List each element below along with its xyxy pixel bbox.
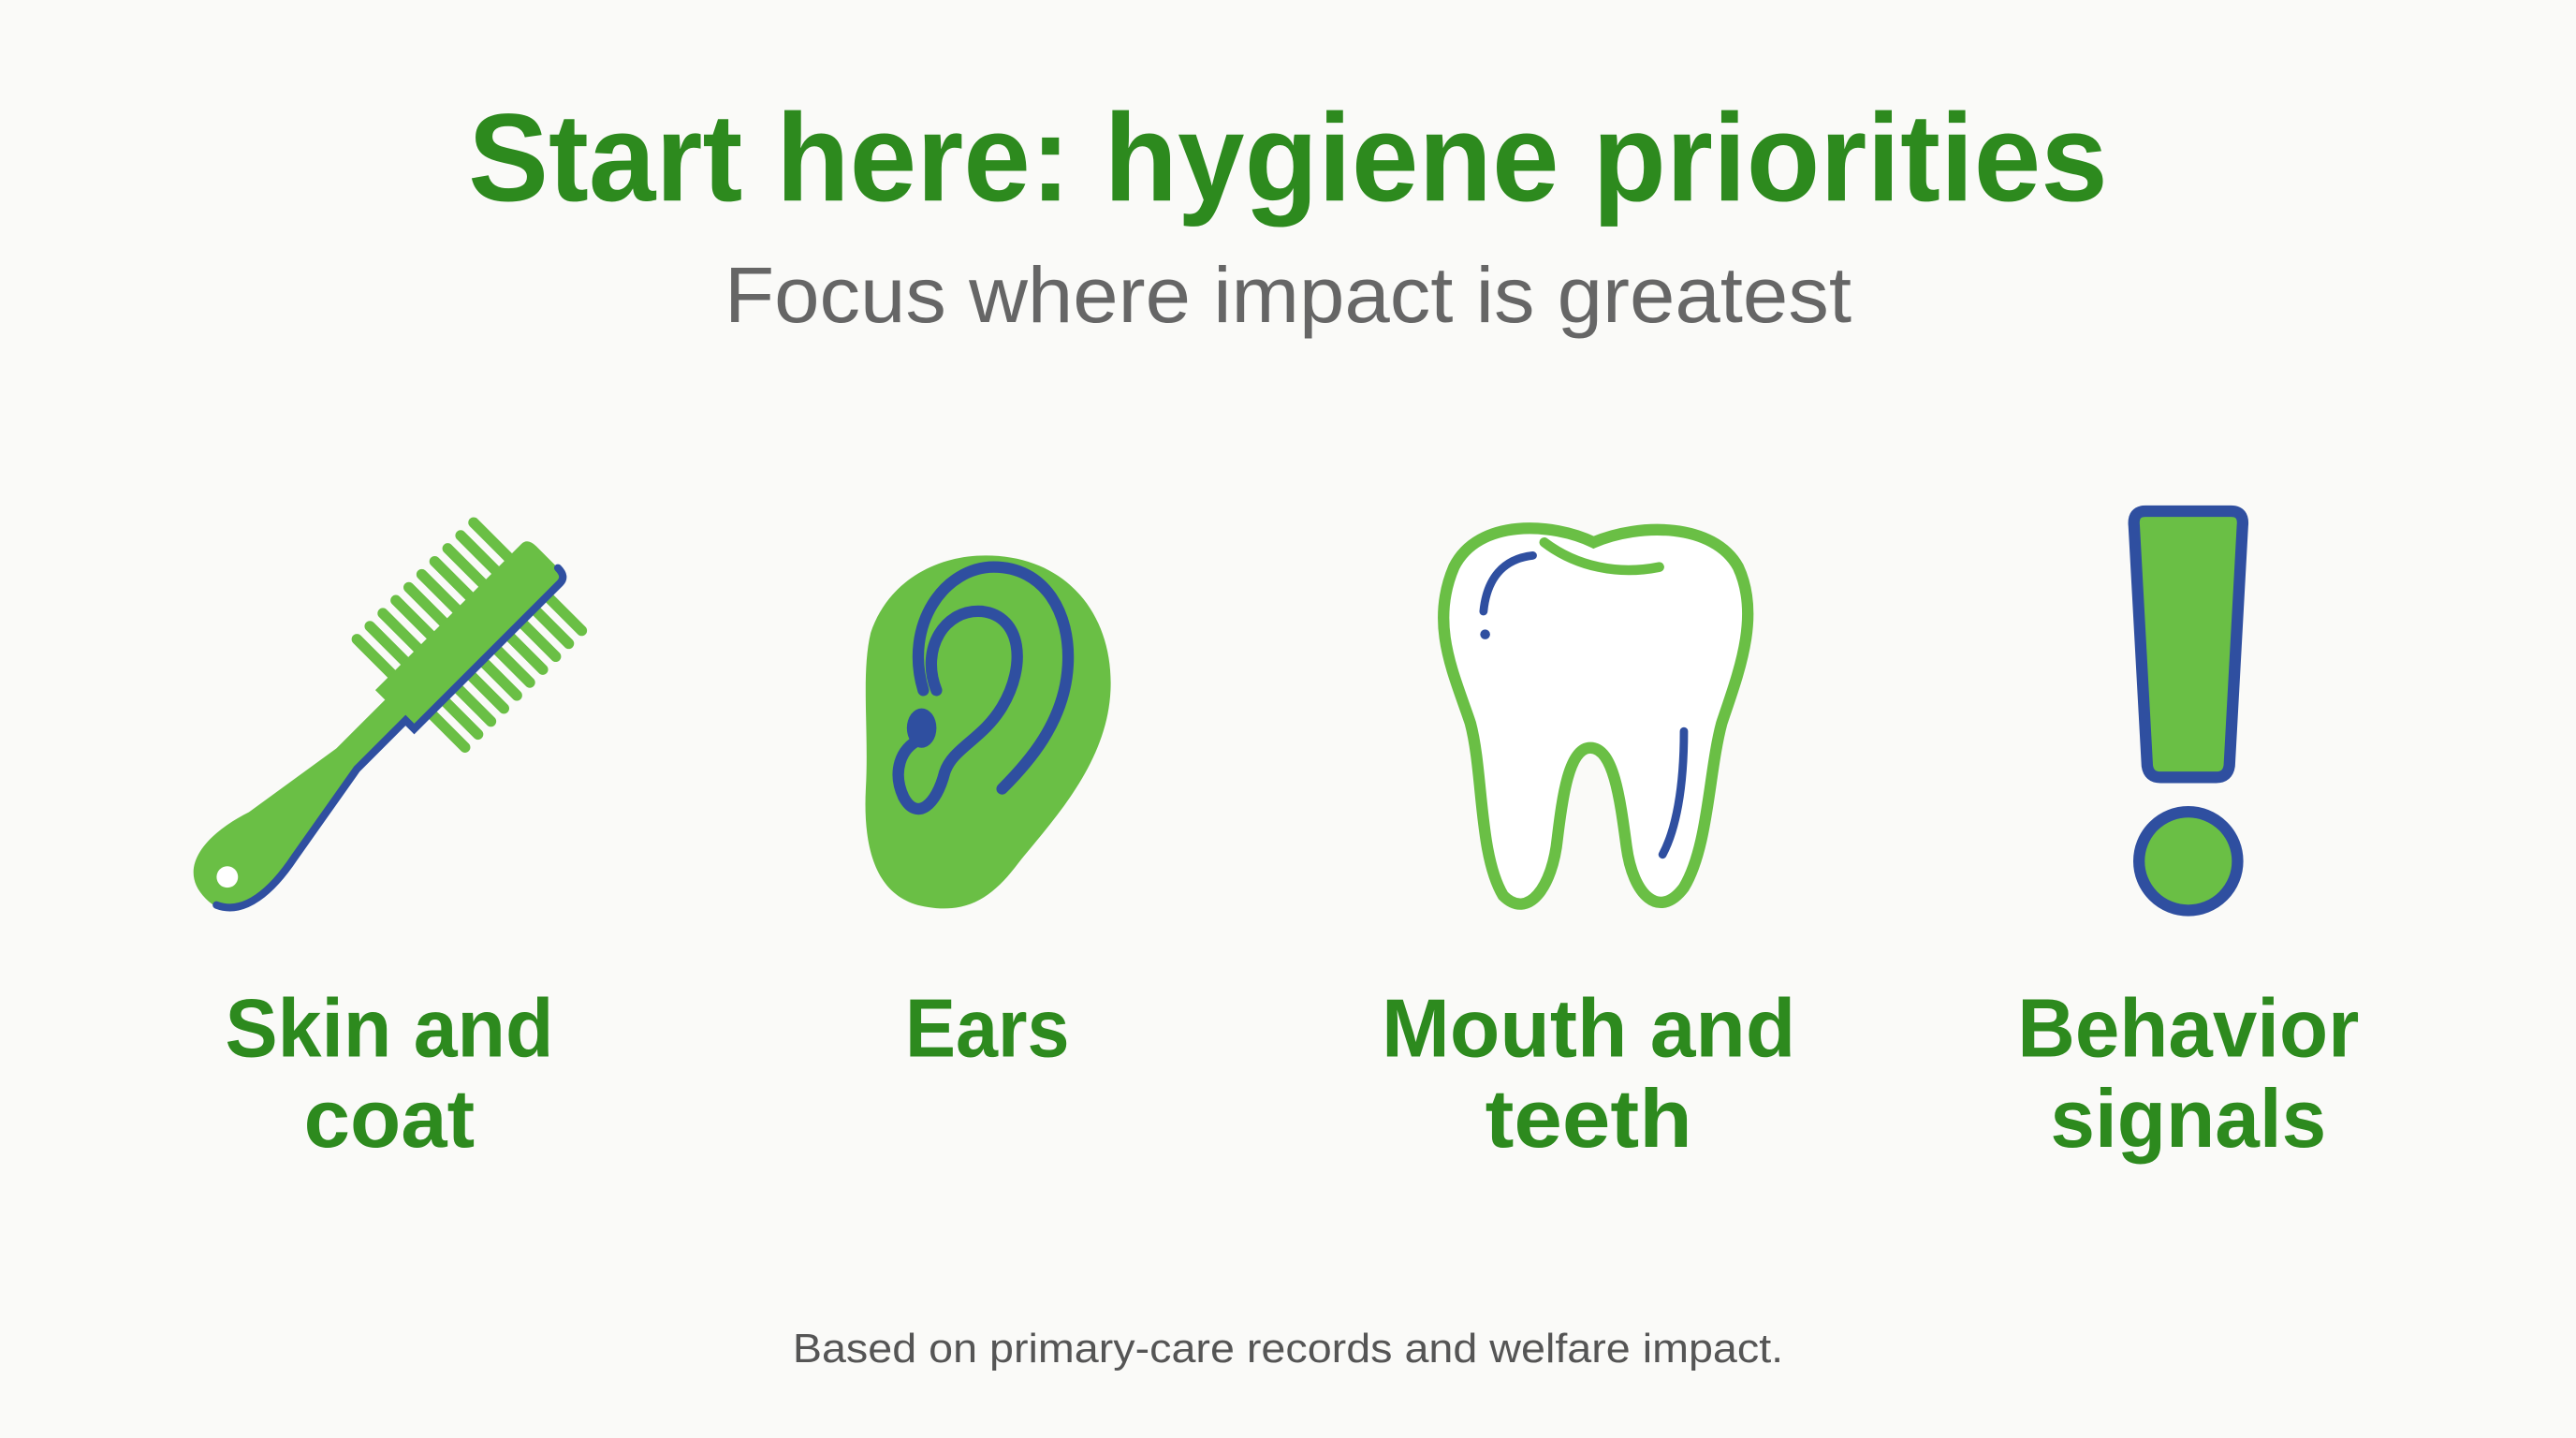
label: ears: Ears <box>905 983 1070 1075</box>
label: skin and coat: coat <box>304 1073 475 1165</box>
label: behavior signals: Behavior <box>2017 983 2359 1075</box>
label: behavior signals: signals <box>2050 1073 2326 1165</box>
icon: exclamation <box>2134 511 2243 910</box>
label: skin and coat <box>225 983 553 1165</box>
icon: tooth <box>1443 528 1748 904</box>
label: mouth and teeth <box>1382 983 1795 1165</box>
subtitle: Focus where impact is greatest <box>724 251 1852 339</box>
label: skin and coat: Skin and <box>225 983 553 1075</box>
label: mouth and teeth: teeth <box>1486 1073 1692 1165</box>
label: mouth and teeth: Mouth and <box>1382 983 1795 1075</box>
footer note: Based on primary-care records and welfare impact. <box>793 1326 1783 1372</box>
label: behavior signals <box>2017 983 2359 1165</box>
icon: ear <box>866 555 1111 908</box>
title: Start here: hygiene priorities <box>468 88 2108 227</box>
icon: brush <box>152 503 601 953</box>
